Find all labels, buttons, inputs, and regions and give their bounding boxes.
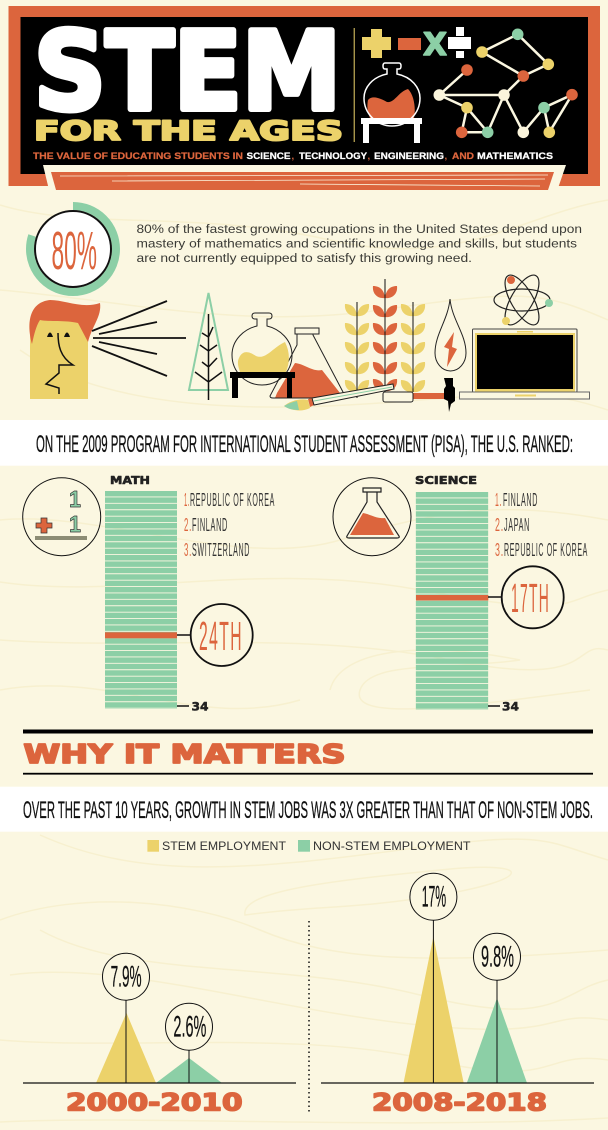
band: growth statement <box>0 787 608 832</box>
scale end: 34: 34 <box>192 700 208 714</box>
network diagram <box>434 28 578 138</box>
callout: 7.9% <box>102 953 150 1083</box>
tagline: AND <box>452 151 474 162</box>
legend <box>147 840 470 853</box>
intro paragraph: mastery of mathematics and scientific knowledge and skills, but students <box>136 236 577 250</box>
icon: wheat plants <box>345 279 425 398</box>
callout: 17th <box>488 566 564 628</box>
tagline: , <box>444 151 447 162</box>
callout: 9.8%: 9.8% <box>481 940 514 974</box>
icon: tree <box>189 293 228 400</box>
top three: math: 3. <box>184 540 192 560</box>
panel: science ranking <box>333 474 588 714</box>
label: science: SCIENCE <box>415 474 477 487</box>
ranking bar: math <box>105 491 177 709</box>
icon: flask <box>333 478 411 556</box>
peak: STEM 7.9% <box>96 1013 156 1083</box>
icon: addition: 1 <box>69 511 81 537</box>
tagline: , <box>292 151 294 162</box>
chart: 2008-2018 <box>321 873 594 1116</box>
icon: face <box>29 300 100 399</box>
tagline: MATHEMATICS <box>477 151 553 162</box>
scale end: 34 <box>488 700 519 714</box>
sound rays <box>92 301 186 376</box>
panel: math ranking: 24TH <box>199 613 243 659</box>
icon: hammer <box>383 378 455 412</box>
tagline: THE VALUE OF EDUCATING STUDENTS IN <box>33 151 243 162</box>
subtitle: for the ages: FOR THE AGES <box>34 116 343 147</box>
legend: STEM EMPLOYMENT <box>162 841 286 853</box>
header black panel <box>20 17 588 174</box>
header frame <box>8 6 600 186</box>
callout: 7.9%: 7.9% <box>111 960 142 994</box>
peak: STEM 17% <box>404 937 464 1083</box>
period label: 2000-2010 <box>66 1088 242 1116</box>
top three: math <box>184 490 275 560</box>
header banner <box>8 6 600 194</box>
ribbon <box>43 165 566 194</box>
scale end: 34 <box>177 700 208 714</box>
ranking bar: science <box>416 492 488 710</box>
icon: addition <box>23 478 101 556</box>
math symbols <box>362 27 471 63</box>
legend: NON-STEM EMPLOYMENT <box>313 841 470 853</box>
peak: non-STEM 9.8% <box>467 998 527 1083</box>
callout: 17%: 17% <box>422 880 446 914</box>
top three: math: FINLAND <box>192 515 228 535</box>
title: STEM: STEM <box>34 10 341 135</box>
icon: header flask <box>361 63 422 143</box>
top three: science <box>495 490 588 560</box>
label: math: MATH <box>110 474 150 487</box>
top three: science: FINLAND <box>503 490 538 510</box>
top three: science: 3. <box>495 540 504 560</box>
icon: paintbrush <box>284 384 394 410</box>
icon: energy drop <box>435 299 466 371</box>
top three: math: SWITZERLAND <box>192 540 250 560</box>
icon: addition: 1 <box>69 486 81 512</box>
chart: 2000-2010 <box>23 953 296 1116</box>
top three: math: 2. <box>184 515 192 535</box>
callout: 9.8% <box>474 933 520 1083</box>
math symbols: X <box>423 27 447 63</box>
stat ring: 80% <box>30 206 116 292</box>
heading: why it matters: WHY IT MATTERS <box>24 740 346 770</box>
top three: math: 1. <box>184 490 190 510</box>
icon: laptop <box>460 329 590 399</box>
peak: non-STEM 2.6% <box>156 1058 222 1083</box>
tagline: SCIENCE <box>246 151 290 162</box>
icon: round flask on table <box>230 313 295 398</box>
icon: conical flask <box>270 328 343 398</box>
scale end: 34: 34 <box>502 700 519 714</box>
stat ring: 80%: 80% <box>52 221 97 281</box>
intro paragraph: are not currently equipped to satisfy this growing need. <box>136 251 472 265</box>
tagline <box>33 151 553 162</box>
tagline: TECHNOLOGY <box>299 151 368 162</box>
top three: science: 2. <box>495 515 504 535</box>
panel: math ranking <box>23 474 275 714</box>
top three: science: JAPAN <box>504 515 530 535</box>
callout: 2.6%: 2.6% <box>173 1010 206 1044</box>
intro paragraph: 80% of the fastest growing occupations in the United States depend upon <box>136 222 582 236</box>
heading: why it matters <box>23 730 593 775</box>
tagline: ENGINEERING <box>374 151 444 162</box>
text: REPUBLIC OF KOREA <box>190 490 275 510</box>
icon: atom <box>494 270 553 330</box>
callout: 2.6% <box>166 1003 212 1083</box>
callout: 17% <box>410 873 457 1083</box>
intro paragraph <box>136 222 582 265</box>
tagline: , <box>368 151 370 162</box>
divider line <box>354 28 355 142</box>
callout: 24th <box>177 604 253 666</box>
band: PISA heading <box>0 420 608 466</box>
period label: 2008-2018 <box>372 1088 547 1116</box>
top three: science: 1. <box>495 490 502 510</box>
